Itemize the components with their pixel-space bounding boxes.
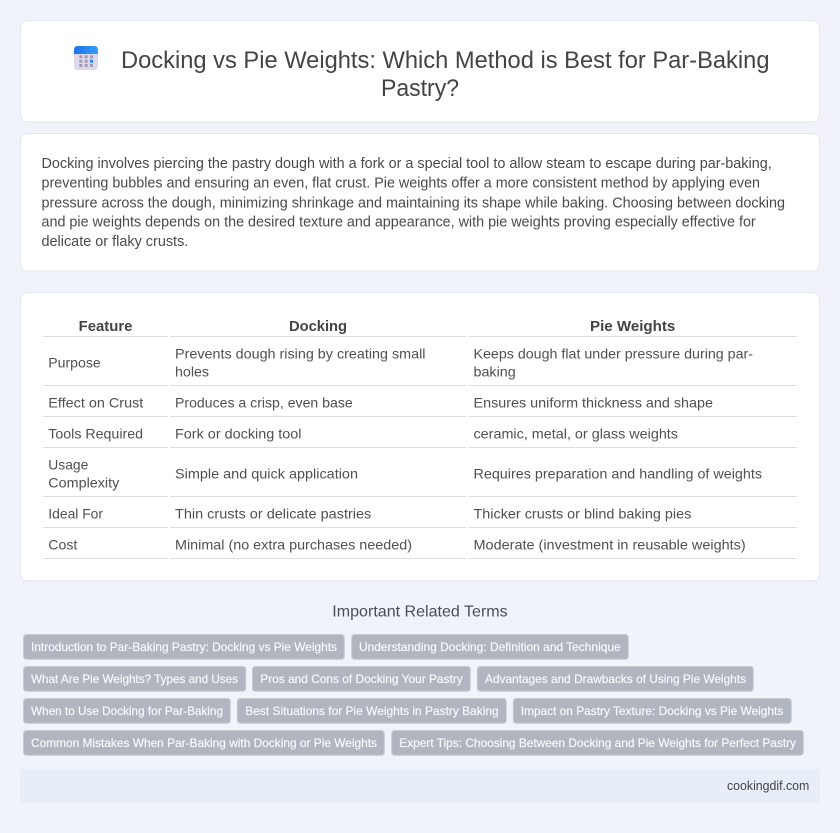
footer bbox=[20, 769, 820, 803]
row: purpose bbox=[48, 345, 753, 379]
row: tools required: Fork or docking tool bbox=[175, 425, 302, 441]
text block: description bbox=[42, 156, 785, 250]
tag bbox=[352, 634, 628, 659]
row: ideal for: Thicker crusts or blind baking pies bbox=[474, 505, 691, 521]
footer: cookingdif.com bbox=[727, 779, 809, 793]
title bbox=[121, 47, 770, 102]
heading: important related terms: Important Related Terms bbox=[332, 604, 508, 621]
row: usage complexity: Complexity bbox=[48, 474, 119, 490]
tag bbox=[237, 698, 506, 723]
panel: intro text bbox=[20, 134, 820, 271]
row: effect on crust: Effect on Crust bbox=[48, 394, 143, 410]
row: cost bbox=[48, 536, 746, 552]
tag: Pros and Cons of Docking Your Pastry bbox=[260, 672, 463, 686]
row: cost: Cost bbox=[48, 536, 77, 552]
tag: Introduction to Par-Baking Pastry: Docking vs Pie Weights bbox=[31, 640, 337, 654]
tag: Expert Tips: Choosing Between Docking and Pie Weights for Perfect Pastry bbox=[399, 736, 796, 750]
row: cost: Minimal (no extra purchases needed) bbox=[175, 536, 412, 552]
tag: What Are Pie Weights? Types and Uses bbox=[31, 672, 238, 686]
row: purpose: Purpose bbox=[48, 354, 101, 370]
row: purpose: Prevents dough rising by creating small bbox=[175, 345, 426, 361]
row: usage complexity bbox=[48, 456, 762, 490]
text block: description: and pie weights depends on the desired texture and appearance, with pie weights proving especially effective for bbox=[42, 215, 756, 231]
title: Pastry? bbox=[381, 75, 459, 102]
row: purpose: Keeps dough flat under pressure during par- bbox=[474, 345, 753, 361]
panel: comparison table bbox=[20, 292, 820, 581]
row: usage complexity: Simple and quick application bbox=[175, 465, 358, 481]
panel: title card bbox=[20, 20, 820, 122]
tag bbox=[24, 634, 344, 659]
tags: related terms bbox=[24, 634, 803, 755]
icon: calendar bbox=[74, 46, 98, 70]
tag: Best Situations for Pie Weights in Pastry Baking bbox=[245, 704, 499, 718]
title: Docking vs Pie Weights: Which Method is Best for Par-Baking bbox=[121, 47, 770, 74]
row: ideal for: Thin crusts or delicate pastries bbox=[175, 505, 371, 521]
tag bbox=[392, 730, 803, 755]
row: cost: Moderate (investment in reusable weights) bbox=[474, 536, 746, 552]
row: effect on crust: Produces a crisp, even base bbox=[175, 394, 353, 410]
row: effect on crust: Ensures uniform thickness and shape bbox=[474, 394, 713, 410]
tag: Impact on Pastry Texture: Docking vs Pie Weights bbox=[521, 704, 783, 718]
tag bbox=[252, 666, 470, 691]
row: purpose: holes bbox=[175, 363, 209, 379]
row: purpose: baking bbox=[474, 363, 516, 379]
tag: When to Use Docking for Par-Baking bbox=[31, 704, 223, 718]
row: tools required bbox=[48, 425, 678, 441]
row: usage complexity: Usage bbox=[48, 456, 89, 472]
row: effect on crust bbox=[48, 394, 713, 410]
row: tools required: Tools Required bbox=[48, 425, 143, 441]
text block: description: delicate or flaky crusts. bbox=[42, 234, 188, 250]
text block: description: preventing bubbles and ensuring an even, flat crust. Pie weights offer a more consistent method by applying even bbox=[42, 176, 760, 192]
tag bbox=[24, 666, 246, 691]
table header: Pie Weights bbox=[590, 319, 675, 335]
text block: description: Docking involves piercing the pastry dough with a fork or a special tool to allow steam to escape during par-baking, bbox=[42, 156, 772, 172]
table header: Feature bbox=[79, 319, 132, 335]
row: usage complexity: Requires preparation and handling of weights bbox=[474, 465, 762, 481]
table header bbox=[79, 319, 675, 335]
tag: Understanding Docking: Definition and Technique bbox=[359, 640, 621, 654]
text block: description: pressure across the dough, minimizing shrinkage and maintaining its shape while baking. Choosing between docking bbox=[42, 195, 785, 211]
tag bbox=[24, 730, 384, 755]
tag bbox=[477, 666, 753, 691]
row: tools required: ceramic, metal, or glass weights bbox=[474, 425, 678, 441]
tag: Common Mistakes When Par-Baking with Docking or Pie Weights bbox=[31, 736, 377, 750]
tag bbox=[513, 698, 791, 723]
row: ideal for: Ideal For bbox=[48, 505, 103, 521]
tag: Advantages and Drawbacks of Using Pie Weights bbox=[485, 672, 746, 686]
tag bbox=[24, 698, 230, 723]
table header: Docking bbox=[289, 319, 347, 335]
row: ideal for bbox=[48, 505, 691, 521]
